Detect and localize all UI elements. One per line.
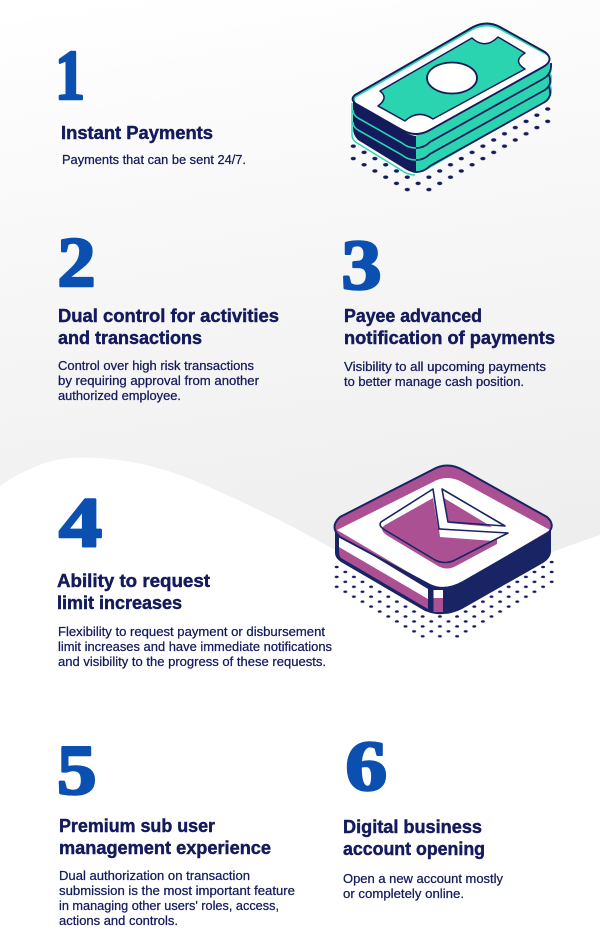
dot shadow <box>348 75 554 193</box>
heading: premium sub user: Premium sub user <box>59 816 215 836</box>
item 3: payee notification: notification of payments <box>344 328 555 348</box>
number 6: 6 <box>346 728 387 806</box>
item 1: instant payments <box>55 37 246 167</box>
number 3: 3 <box>342 227 382 305</box>
item 5: sub user management: submission is the most important feature <box>59 884 295 898</box>
item 5: sub user management: actions and controls. <box>59 914 178 928</box>
item 4: limit increases: and visibility to the progress of these requests. <box>58 655 326 669</box>
item 2: dual control: by requiring approval from another <box>58 374 259 388</box>
number 5: 5 <box>57 732 96 810</box>
description: digital business: Open a new account mostly <box>343 872 504 886</box>
top bill <box>353 24 553 139</box>
icon: email tile <box>333 466 556 638</box>
item 6: digital account opening: account opening <box>343 839 485 859</box>
number 1: 1 <box>55 37 85 115</box>
envelope <box>380 489 508 568</box>
bill centre circle <box>427 62 477 94</box>
item 3: payee notification <box>342 227 555 389</box>
icon: stack of money <box>348 24 554 193</box>
item 5: sub user management: management experience <box>59 838 271 858</box>
item 5: sub user management: in managing other users' roles, access, <box>59 899 279 913</box>
item 4: limit increases: limit increases <box>57 593 182 613</box>
item 2: dual control <box>58 224 279 403</box>
tile sides <box>335 525 551 614</box>
heading: instant payments: Instant Payments <box>61 123 213 143</box>
heading: dual control: Dual control for activities <box>58 306 279 326</box>
item 4: limit increases: limit increases and have immediate notifications <box>58 640 332 654</box>
tile top face <box>334 466 552 588</box>
number 4: 4 <box>59 484 102 562</box>
heading: payee: Payee advanced <box>344 306 482 326</box>
description: limit increases: Flexibility to request payment or disbursement <box>58 625 326 639</box>
description: payee: Visibility to all upcoming payments <box>344 360 546 374</box>
description: dual control: Control over high risk transactions <box>58 359 254 373</box>
item 4: limit increases <box>57 484 332 669</box>
description: premium sub user: Dual authorization on transaction <box>59 869 250 883</box>
bill centre panel <box>378 37 525 121</box>
description: payments: Payments that can be sent 24/7. <box>62 153 246 167</box>
bill stack sides <box>352 62 552 175</box>
item 2: dual control: and transactions <box>58 328 202 348</box>
item 5: sub user management <box>57 732 295 928</box>
item 6: digital account opening: or completely online. <box>343 887 464 901</box>
dot shadow <box>333 530 556 638</box>
heading: digital business: Digital business <box>343 817 482 837</box>
item 6: digital account opening <box>343 728 504 901</box>
number 2: 2 <box>58 224 96 302</box>
item 2: dual control: authorized employee. <box>58 389 181 403</box>
heading: limit increases: Ability to request <box>57 571 210 591</box>
item 3: payee notification: to better manage cash position. <box>344 375 524 389</box>
